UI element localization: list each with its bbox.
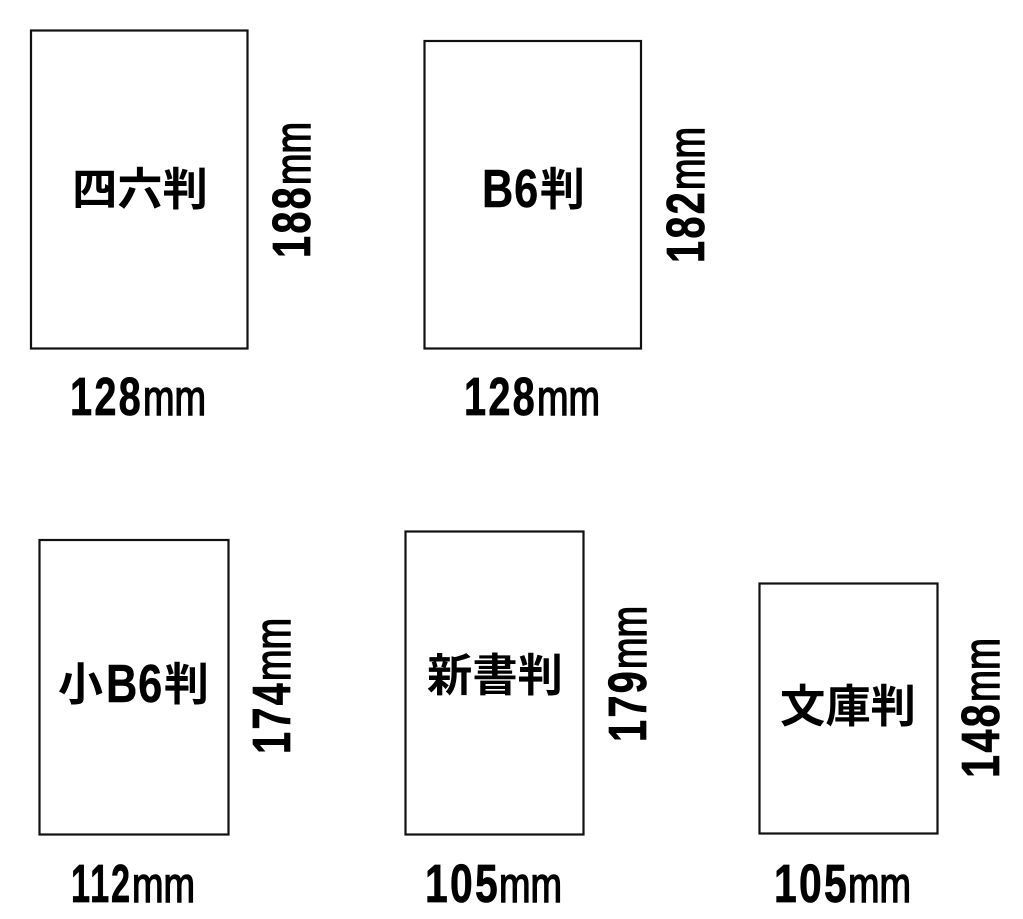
height: 148mm: mm <box>954 638 1010 702</box>
width: 128mm: 128 <box>464 367 537 427</box>
height: 174mm: mm <box>245 618 301 681</box>
height: 188mm: mm <box>265 122 321 185</box>
panel: 四六判 <box>31 30 322 427</box>
height: 179mm: mm <box>601 606 657 669</box>
book outline: 文庫判 <box>760 584 938 834</box>
panel: 小B6判 <box>40 540 302 914</box>
width: 128mm: 128 <box>70 367 143 427</box>
height: 182mm: 182 <box>656 190 716 263</box>
width: 128mm: mm <box>537 370 600 426</box>
label: B6判: B6 <box>482 159 539 219</box>
label: B6判: 判 <box>540 164 585 215</box>
book outline: B6判 <box>424 41 641 348</box>
height: 182mm: mm <box>659 127 715 190</box>
height: 179mm: 179 <box>598 669 658 742</box>
width: 112mm: mm <box>132 857 195 913</box>
height: 148mm: 148 <box>951 702 1011 778</box>
panel: 新書判 <box>406 532 658 914</box>
width: 105mm: mm <box>848 857 911 913</box>
panel: 文庫判 <box>760 584 1011 914</box>
height: 188mm: 188 <box>262 185 322 258</box>
label: 新書判: 新書判 <box>427 650 563 701</box>
label: 文庫判: 文庫判 <box>780 681 916 732</box>
width: 105mm: mm <box>499 857 562 913</box>
width: 128mm: mm <box>143 370 206 426</box>
width: 105mm: 105 <box>425 854 500 914</box>
panel: B6判 <box>424 41 716 427</box>
width: 105mm: 105 <box>774 854 849 914</box>
label: 小B6判: 判 <box>164 659 209 710</box>
label: 四六判: 四六判 <box>72 164 208 215</box>
height: 174mm: 174 <box>242 681 302 754</box>
book outline: 四六判 <box>31 30 248 348</box>
label: B6判 <box>482 159 585 219</box>
book outline: 小B6判 <box>40 540 228 834</box>
label: 小B6判: B6 <box>106 654 163 714</box>
width: 112mm: 112 <box>71 854 132 914</box>
label: 小B6判: 小 <box>58 659 103 710</box>
book outline: 新書判 <box>406 532 584 834</box>
label: 小B6判 <box>58 654 209 714</box>
